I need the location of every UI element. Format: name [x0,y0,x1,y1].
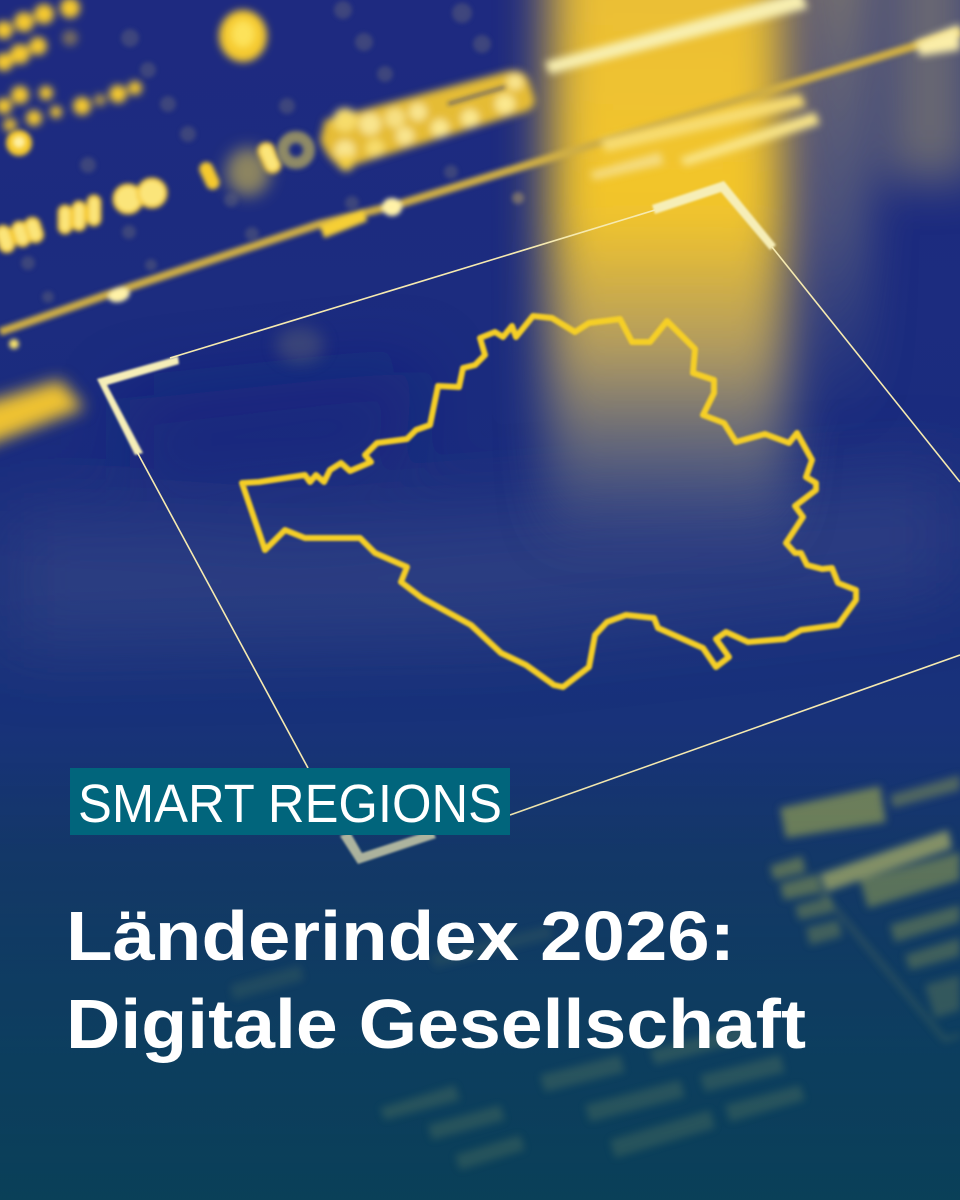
yellow light column [548,0,960,550]
blurred data: chips row [0,141,283,254]
blurred data: faint dots [21,1,524,303]
bottom blurred table [230,925,805,1170]
frame: thin outline [136,210,960,815]
left glowing blur [0,380,84,448]
background glow: haze across the middle [0,370,960,650]
title: Länderindex 2026: [66,897,735,975]
blurred data: top-left rows [0,0,270,196]
title [66,897,806,1063]
frame: corner brackets [97,181,776,864]
title: Digitale Gesellschaft [66,985,806,1063]
blurred data: ring and slot [283,87,505,163]
bottom fade [0,760,960,1200]
bottom-right blurred table [770,775,960,1040]
tag: SMART REGIONS: SMART REGIONS [78,774,502,834]
state outline [242,316,856,687]
glowing dot [219,10,267,62]
blurred data: large bar cluster [320,70,535,171]
top-right light bars [545,0,960,180]
blurred data: diagonal beam [0,32,960,349]
